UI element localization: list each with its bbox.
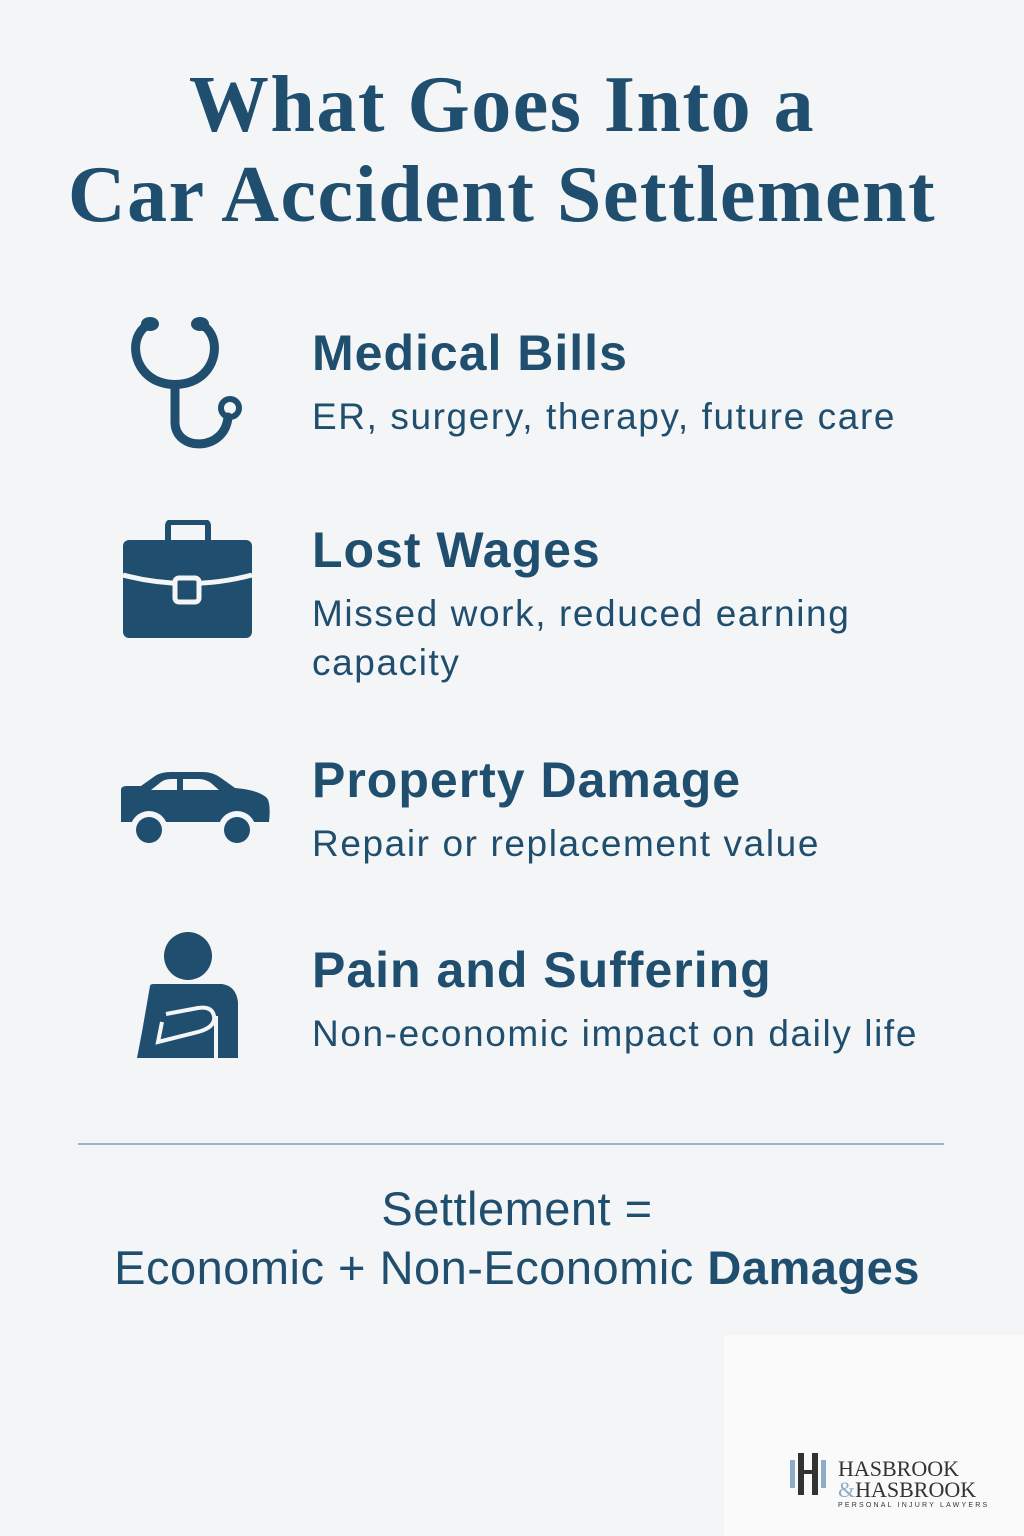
item: lost wages: Missed work, reduced earning capacity	[312, 593, 850, 683]
icon: car	[121, 772, 270, 843]
item: medical bills: Medical Bills	[312, 325, 628, 381]
item: medical bills	[312, 325, 896, 437]
item: lost wages: Lost Wages	[312, 522, 601, 578]
item: property damage: Repair or replacement value	[312, 823, 820, 864]
title	[68, 61, 936, 239]
logo: HASBROOK	[838, 1456, 959, 1481]
title: What Goes Into a	[189, 61, 815, 149]
icon: briefcase	[123, 520, 252, 638]
item: medical bills: ER, surgery, therapy, future care	[312, 396, 896, 437]
icon: person	[137, 932, 238, 1058]
title: Car Accident Settlement	[68, 151, 936, 239]
logo: PERSONAL INJURY LAWYERS	[838, 1502, 989, 1509]
item: pain and suffering	[312, 942, 918, 1054]
icon: stethoscope	[131, 317, 242, 448]
item: pain and suffering: Non-economic impact on daily life	[312, 1013, 918, 1054]
formula: Settlement =	[381, 1182, 653, 1235]
item: property damage: Property Damage	[312, 752, 741, 808]
formula	[114, 1182, 920, 1294]
logo: &HASBROOK	[838, 1477, 976, 1502]
item: property damage	[312, 752, 820, 864]
logo	[724, 1335, 1024, 1536]
item: pain and suffering: Pain and Suffering	[312, 942, 772, 998]
formula: Economic + Non-Economic Damages	[114, 1241, 920, 1294]
item: lost wages	[312, 522, 850, 683]
